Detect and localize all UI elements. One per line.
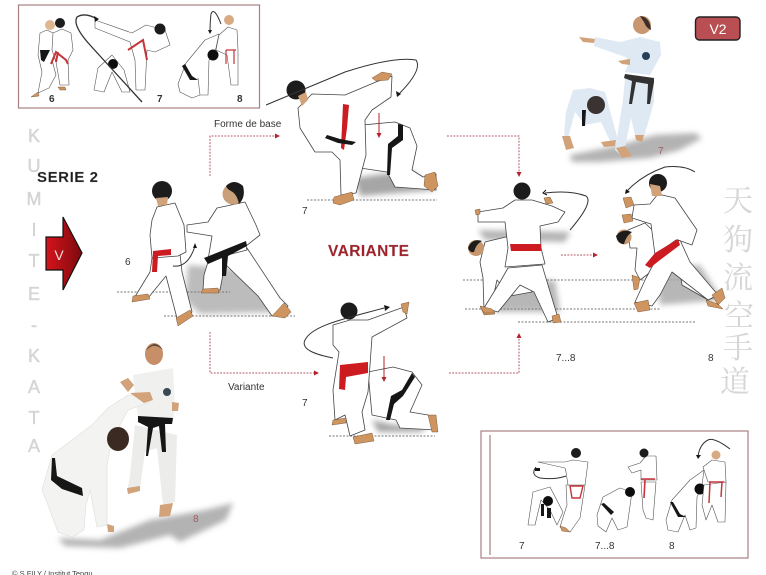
label: kanji watermark: [720, 176, 754, 401]
figure: step 7 variant: [304, 302, 438, 444]
text: step 7...8: 7...8: [595, 541, 615, 552]
small figures: step 7: [528, 448, 588, 532]
small figures: step 7...8: [597, 448, 657, 532]
arrow: [543, 190, 588, 230]
arrow: down: [382, 356, 386, 382]
shadow: [58, 503, 233, 548]
shadow: [372, 420, 430, 432]
text: step 8: 8: [708, 353, 714, 364]
photo: step 7 tori and uke: [562, 16, 702, 162]
figure: step 6 pair of karateka: [117, 181, 295, 326]
title: Kumite-Kata vertical letters: K: [28, 126, 40, 146]
defender: [132, 181, 197, 326]
text: step 7 bottom: 7: [302, 398, 308, 409]
panel: bottom-right sequence 7-7...8-8: [481, 431, 748, 558]
text: step 7: 7: [519, 541, 525, 552]
text: photo step 7: 7: [658, 146, 664, 157]
tori: [579, 16, 661, 158]
title: Kumite-Kata vertical letters: A: [28, 377, 40, 397]
title: Kumite-Kata vertical letters: U: [28, 156, 40, 176]
shadow: [570, 133, 702, 162]
tori kicking: [286, 72, 392, 205]
arrow: down: [376, 113, 382, 138]
label: kanji watermark: 道: [720, 357, 750, 401]
title: Kumite-Kata vertical letters: M: [26, 189, 42, 209]
arrow: 7...8 to 8: [561, 252, 598, 258]
arrow: base form to 7...8: [447, 136, 522, 177]
label: kanji watermark: 流: [723, 253, 753, 297]
uke: [42, 392, 153, 537]
title: Kumite-Kata vertical letters: I: [31, 220, 37, 240]
arrow: kick path: [266, 59, 418, 105]
arrow: variant to 7...8: [449, 333, 522, 373]
text: Forme de base: Forme de base: [214, 119, 282, 130]
tori: [622, 174, 725, 312]
text: Variante: Variante: [228, 382, 265, 393]
shadow: [185, 265, 290, 314]
text: step 6: 6: [49, 94, 55, 105]
text: step 7 top: 7: [302, 206, 308, 217]
small figures: step 8: [178, 12, 238, 98]
attacker: [187, 182, 291, 318]
shadow: [355, 170, 436, 196]
label: kanji watermark: 空: [724, 291, 754, 335]
title: Variante: VARIANTE: [328, 243, 409, 260]
baseline: [307, 199, 437, 201]
text: step 7: 7: [157, 94, 163, 105]
icon: red arrow with V: [46, 217, 82, 290]
arrow: [625, 167, 695, 194]
tori: [120, 343, 179, 517]
photo: step 8 tori and uke: [42, 343, 233, 548]
title: Kumite-Kata vertical letters: -: [31, 315, 37, 335]
figure: step 8: [616, 167, 725, 312]
tori: [475, 182, 565, 323]
uke: [468, 236, 532, 315]
panel: top-left sequence 6-7-8: [18, 5, 260, 108]
shadows: [655, 265, 722, 305]
text: photo step 8: 8: [193, 514, 199, 525]
baselines: [117, 292, 295, 316]
text: step 8: 8: [669, 541, 675, 552]
small figures: step 6: [31, 18, 73, 97]
arrow: to base form: [210, 134, 280, 176]
icon: red arrow with V: V: [54, 247, 64, 263]
tori: [332, 302, 409, 444]
heading: Serie 2: SERIE 2: [37, 169, 98, 186]
title: Kumite-Kata vertical letters: [26, 126, 42, 456]
label: kanji watermark: 狗: [723, 215, 753, 259]
uke kneeling: [368, 367, 438, 432]
title: Kumite-Kata vertical letters: K: [28, 346, 40, 366]
uke: [562, 88, 618, 150]
text: step 8: 8: [237, 94, 243, 105]
uke: [616, 223, 715, 300]
shadows: [478, 230, 570, 312]
label: kanji watermark: 天: [723, 176, 753, 220]
figure: step 7...8: [463, 182, 696, 323]
title: Kumite-Kata vertical letters: E: [28, 284, 40, 304]
text: step 7...8: 7...8: [556, 353, 576, 364]
arrow: to variant: [210, 332, 319, 376]
title: Kumite-Kata vertical letters: A: [28, 436, 40, 456]
baseline: [329, 435, 435, 437]
button: V2 badge: V2: [709, 21, 727, 37]
title: Kumite-Kata vertical letters: T: [28, 408, 40, 428]
small figures: step 8: [666, 439, 730, 532]
title: Kumite-Kata vertical letters: T: [28, 251, 40, 271]
small figures: step 7: [76, 15, 170, 102]
baselines: [463, 280, 696, 322]
arrow: loop: [304, 305, 390, 358]
button: V2 badge: [696, 17, 740, 40]
uke kneeling: [360, 122, 438, 192]
text: step 6: 6: [125, 257, 131, 268]
figure: step 7 base form throw: [266, 59, 438, 205]
label: kanji watermark: 手: [723, 323, 753, 367]
